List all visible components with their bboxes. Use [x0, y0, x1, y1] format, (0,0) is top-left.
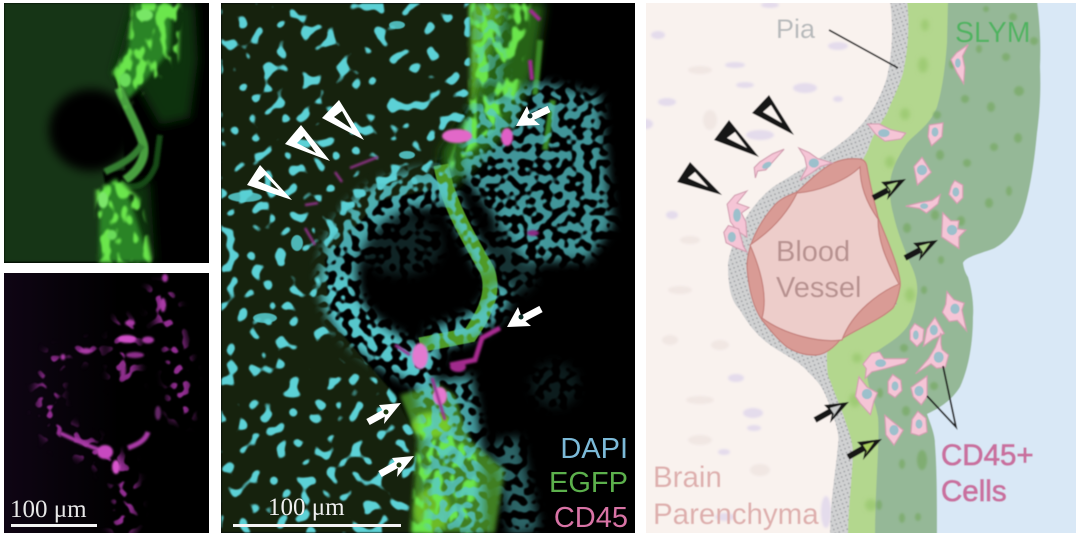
black arrow — [873, 179, 906, 200]
label: Brain Parenchyma: Parenchyma — [653, 498, 819, 531]
legend: channel labels — [549, 433, 628, 534]
cell — [888, 374, 902, 398]
CD45 magenta cells — [305, 10, 540, 420]
cell — [951, 45, 968, 84]
cell — [799, 148, 832, 180]
cell — [942, 292, 966, 331]
panel: schematic diagram — [639, 0, 1080, 537]
brain parenchyma green background — [4, 3, 133, 262]
cell — [911, 376, 927, 405]
cell — [906, 195, 940, 213]
cell — [727, 191, 749, 237]
brain parenchyma — [646, 3, 892, 533]
white arrowhead — [247, 165, 292, 200]
scale bar: main panel: 100 μm — [268, 494, 345, 521]
cell — [910, 324, 924, 346]
brain parenchyma background — [221, 3, 470, 533]
label: CD45+ Cells: Cells — [941, 475, 1007, 508]
cell — [949, 180, 963, 204]
dim tissue haze — [113, 3, 198, 125]
label: Blood Vessel: Blood — [776, 236, 850, 268]
label: Brain Parenchyma — [653, 461, 819, 531]
label: CD45+ Cells: CD45+ — [941, 439, 1034, 472]
label: Blood Vessel: Vessel — [776, 272, 861, 304]
legend: channel labels: DAPI — [560, 433, 628, 465]
bright CD45 signal — [60, 274, 168, 474]
label: Brain Parenchyma: Brain — [653, 461, 722, 494]
panel: CD45 magenta micrograph — [4, 273, 209, 533]
cell — [914, 157, 931, 185]
sparse DAPI nuclei in parenchyma — [221, 3, 470, 533]
black arrowhead — [752, 95, 794, 135]
bright SLYM band — [119, 88, 144, 180]
white arrow: bottom SLYM — [380, 456, 414, 477]
bright green noise — [96, 3, 180, 262]
white arrowhead — [322, 100, 364, 140]
panel: EGFP green micrograph — [4, 3, 209, 263]
cell — [924, 317, 944, 346]
label: CD45+ Cells — [941, 439, 1034, 508]
SLYM light green inner layer — [826, 3, 948, 533]
green band — [400, 3, 553, 533]
SLYM dark green outer layer — [867, 3, 1040, 533]
legend: channel labels: EGFP — [549, 467, 628, 499]
legend: channel labels: CD45 — [554, 502, 628, 534]
cell — [942, 213, 966, 248]
label: Pia: Pia — [776, 14, 816, 44]
CD45+ cells — [724, 45, 968, 445]
cell — [911, 411, 927, 436]
pia layer — [728, 3, 909, 533]
dense DAPI ring and tissue — [338, 3, 612, 533]
scale bar: left panel: 100 μm — [10, 496, 87, 523]
subarachnoid space (blue) — [927, 0, 1080, 537]
leader lines: CD45+ — [927, 366, 956, 427]
black arrowhead — [714, 120, 759, 157]
cell — [928, 123, 943, 146]
cell — [916, 333, 949, 374]
faint background haze — [4, 273, 73, 533]
scale bar: main panel — [233, 494, 401, 527]
black arrow — [848, 439, 882, 460]
label: SLYM: SLYM — [955, 17, 1030, 49]
black arrow — [905, 240, 938, 261]
cell — [885, 415, 903, 445]
cell — [754, 149, 784, 178]
white arrow: lower SLYM — [368, 403, 401, 424]
black arrow — [815, 402, 849, 423]
label: Blood Vessel — [776, 240, 860, 298]
dark vessel lumen — [49, 89, 133, 171]
black arrowhead — [677, 162, 722, 195]
key nuclei clusters — [228, 21, 415, 323]
cell — [868, 124, 906, 141]
white arrowhead — [285, 125, 330, 161]
white arrow: upper SLYM — [516, 106, 549, 126]
leader line: Pia — [829, 30, 898, 68]
cell — [856, 377, 877, 415]
cell — [863, 352, 908, 378]
green brightness noise — [412, 3, 530, 533]
cell — [724, 226, 747, 252]
panel: merged DAPI EGFP CD45 micrograph — [221, 3, 635, 533]
white arrow: right SLYM — [507, 307, 541, 327]
speckled CD45 signal — [48, 285, 181, 533]
blood vessel — [747, 159, 900, 355]
